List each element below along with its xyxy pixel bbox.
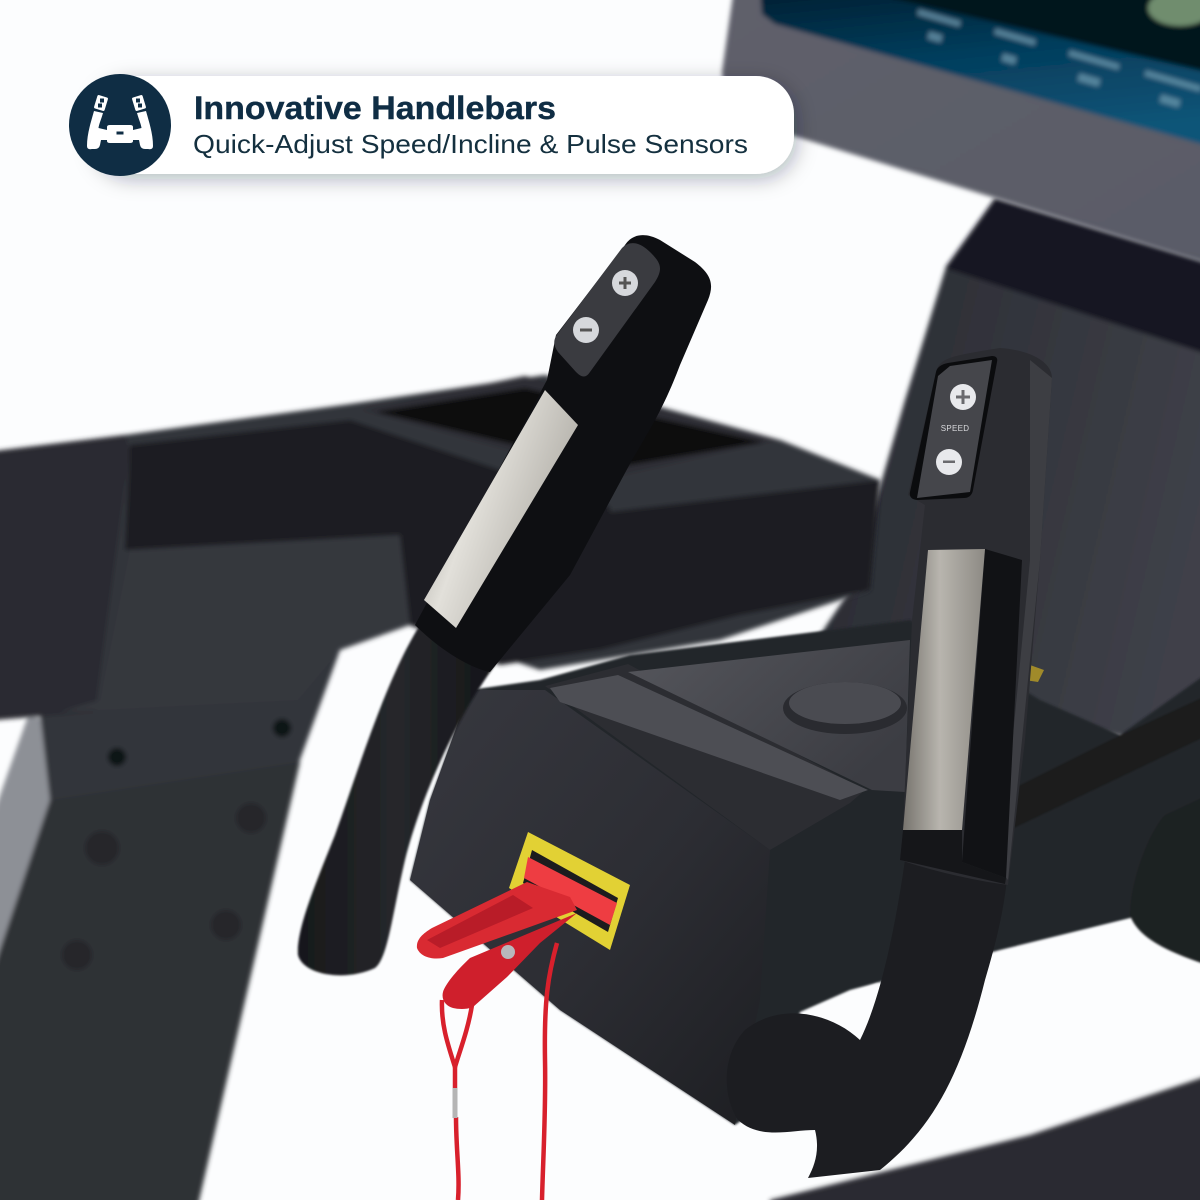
right handle body [900,348,1052,885]
speed label: SPEED [941,424,969,433]
right deck arm and console body [410,620,1200,1125]
heading: Innovative Handlebars [194,90,556,126]
badge [69,74,794,176]
cords [442,943,557,1200]
left handle body [415,235,711,672]
safety key [417,832,630,1200]
left grip [298,625,495,975]
subheading: Quick-Adjust Speed/Incline & Pulse Sensors [193,129,748,159]
icon: handlebars [87,95,153,149]
left button pad [554,243,660,376]
console front face [410,690,770,1125]
clip lower arm [443,913,577,1009]
right grip [727,860,1008,1178]
left silver sensor [424,390,578,628]
right handlebar [727,348,1052,1178]
clip upper lever [417,882,577,959]
left upright frame [0,375,880,1200]
yellow plate [509,832,630,950]
icon circle [69,74,171,176]
console top tray [545,640,1044,850]
display housing and screen [722,0,1200,274]
right silver sensor [903,549,985,830]
right button pad [910,356,997,500]
pill [90,76,794,174]
left handlebar [298,235,711,975]
bottom right deck [770,1065,1200,1200]
console tower [810,198,1200,760]
